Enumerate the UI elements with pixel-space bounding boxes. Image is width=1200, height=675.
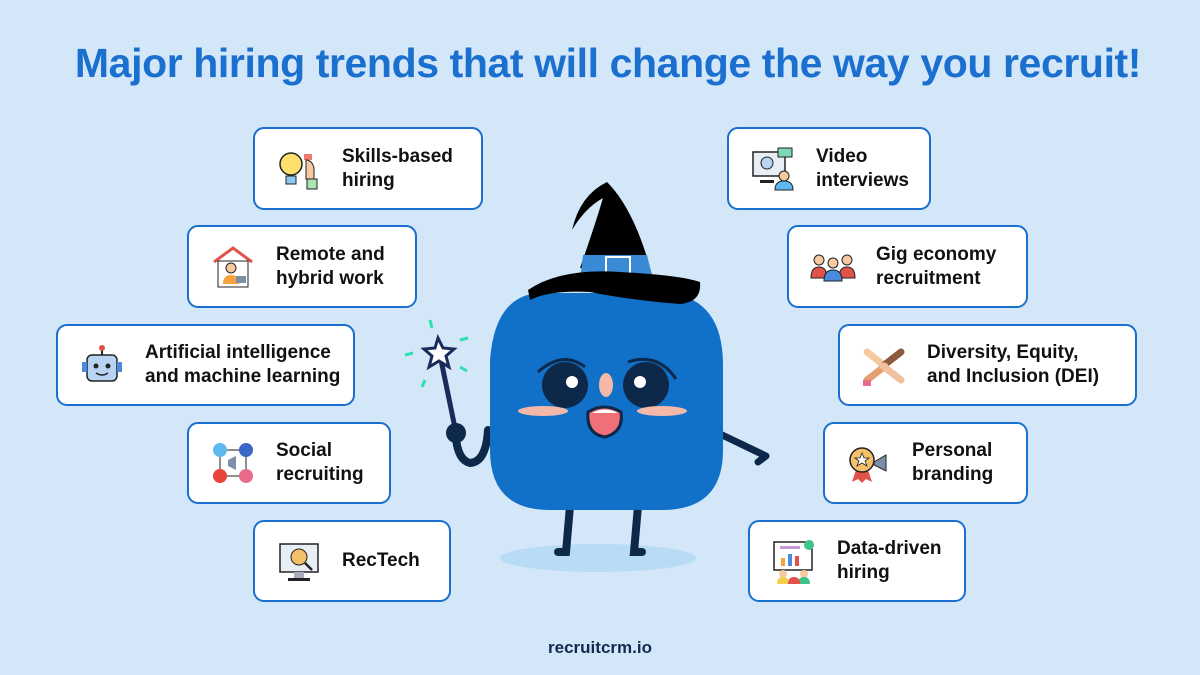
footer: recruitcrm.io — [548, 638, 652, 657]
mascot: wizard character — [404, 182, 770, 572]
box: DEI — [838, 324, 1137, 406]
box: gig economy: recruitment — [876, 268, 981, 288]
box: skills-based hiring: hiring — [342, 170, 395, 190]
box: DEI: and Inclusion (DEI) — [927, 366, 1099, 387]
box: video interviews — [727, 127, 931, 210]
box: social recruiting — [187, 422, 391, 504]
box: gig economy — [787, 225, 1028, 308]
box: personal branding: Personal — [912, 440, 992, 461]
box: video interviews: Video — [816, 146, 867, 166]
box: gig economy: Gig economy — [876, 244, 996, 264]
box: social recruiting: recruiting — [276, 464, 364, 485]
box: data-driven hiring — [748, 520, 966, 602]
box: rectech — [253, 520, 451, 602]
box: remote and hybrid work: hybrid work — [276, 268, 384, 288]
box: skills-based hiring — [253, 127, 483, 210]
box: remote and hybrid work — [187, 225, 417, 308]
box: data-driven hiring: Data-driven — [837, 538, 942, 559]
box: DEI: Diversity, Equity, — [927, 342, 1078, 363]
box: skills-based hiring: Skills-based — [342, 146, 453, 166]
box: personal branding — [823, 422, 1028, 504]
box: AI: Artificial intelligence — [145, 342, 331, 363]
title: Major hiring trends that will change the way you recruit! — [75, 40, 1141, 86]
box: video interviews: interviews — [816, 170, 909, 190]
box: personal branding: branding — [912, 464, 993, 485]
box: AI — [56, 324, 355, 406]
box: AI: and machine learning — [145, 366, 340, 387]
box: social recruiting: Social — [276, 440, 332, 461]
box: data-driven hiring: hiring — [837, 562, 890, 583]
box: rectech: RecTech — [342, 550, 420, 571]
box: remote and hybrid work: Remote and — [276, 244, 385, 264]
